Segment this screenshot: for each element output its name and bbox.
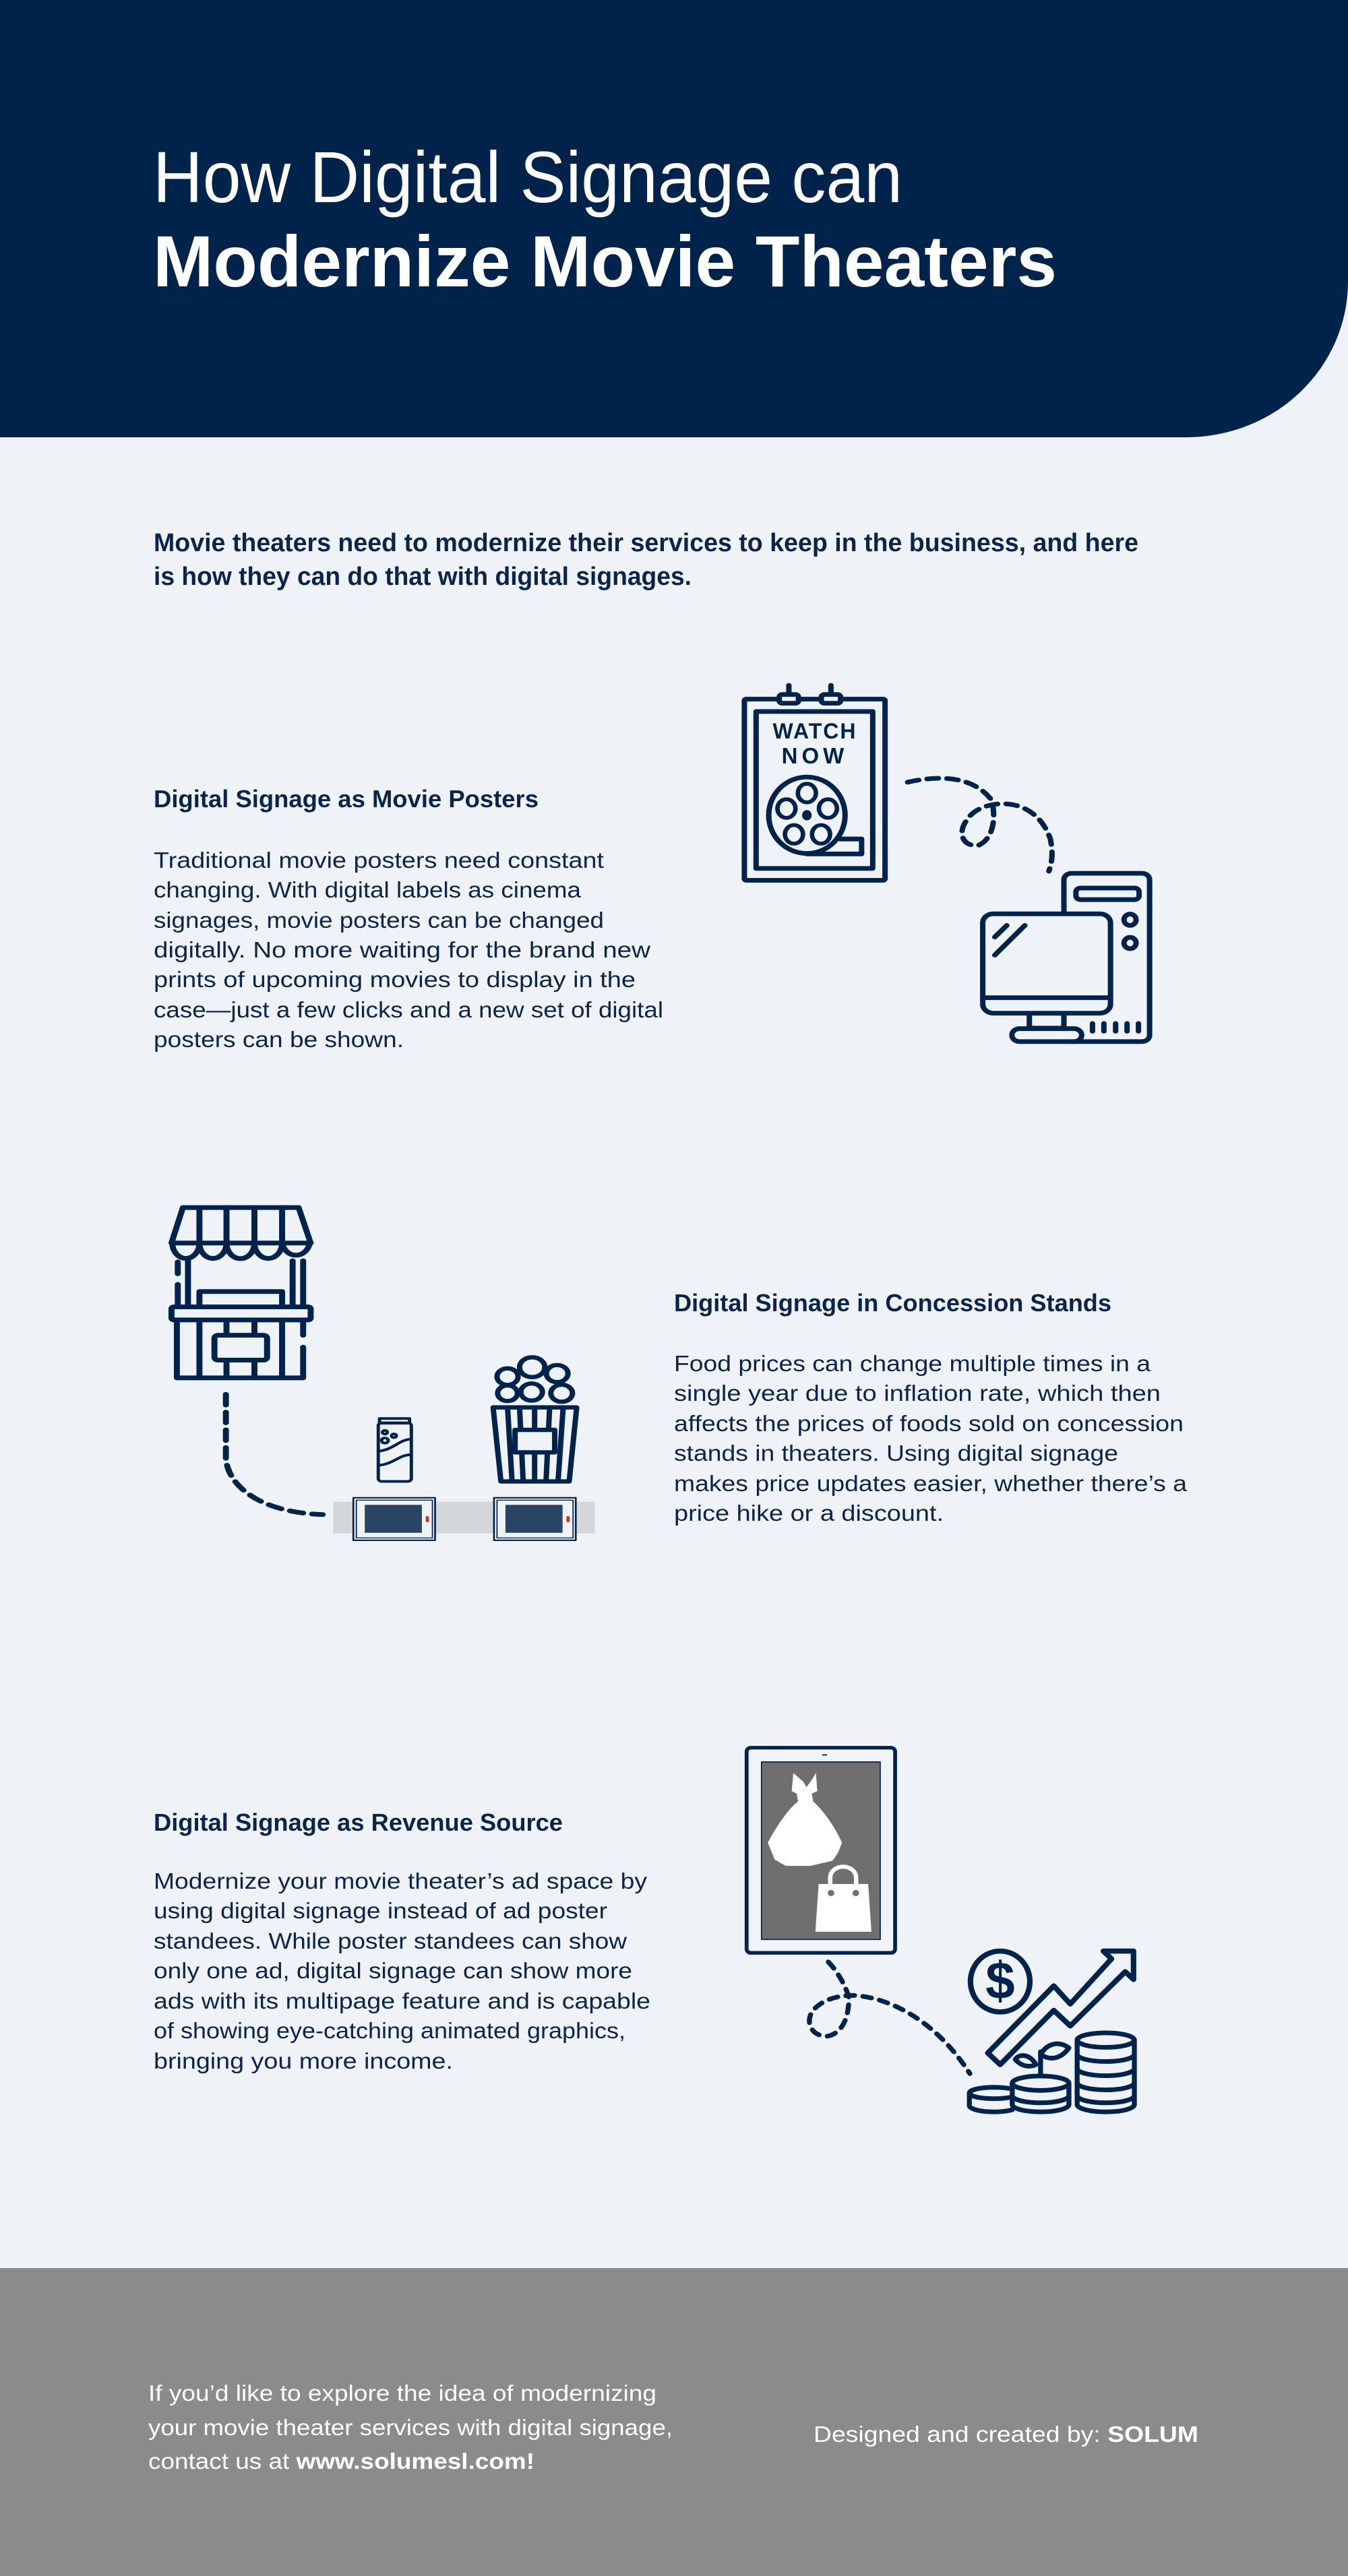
icon: popcorn [493, 1357, 577, 1482]
paragraph: movie posters: changing. With digital labels as cinema [154, 877, 582, 902]
icon: poster frame [744, 685, 885, 880]
intro text: Movie theaters need to modernize their services to keep in the business, and here [154, 529, 1138, 557]
arrow: dashed path [809, 1962, 970, 2073]
icon: dollar sign: $ [985, 1951, 1015, 2010]
title: Modernize Movie Theaters [153, 220, 1057, 302]
paragraph: revenue source: only one ad, digital signage can show more [154, 1958, 632, 1983]
footer contact text: contact us at www.solumesl.com! [148, 2449, 534, 2474]
paragraph: concession stands: price hike or a discount. [674, 1501, 944, 1526]
icon: tablet with ad [747, 1748, 895, 1953]
intro text: is how they can do that with digital signages. [154, 563, 692, 591]
paragraph: revenue source: standees. While poster standees can show [154, 1928, 627, 1953]
paragraph: concession stands: affects the prices of foods sold on concession [674, 1411, 1184, 1436]
header banner [0, 0, 1348, 437]
paragraph: concession stands: Food prices can change multiple times in a [674, 1351, 1151, 1376]
footer [0, 2268, 1348, 2576]
paragraph: movie posters: signages, movie posters can be changed [154, 908, 604, 933]
intro text [154, 529, 1138, 591]
icon: dollar coin and growth arrow [971, 1951, 1134, 2065]
poster text: WATCH NOW: WATCH [773, 719, 857, 743]
paragraph: movie posters: Traditional movie posters need constant [154, 848, 604, 873]
title [153, 136, 1057, 302]
paragraph: concession stands [674, 1351, 1188, 1526]
heading: concession stands: Digital Signage in Concession Stands [674, 1289, 1111, 1317]
footer contact text: If you’d like to explore the idea of modernizing [148, 2381, 656, 2406]
arrow: dashed path [226, 1394, 323, 1515]
paragraph: revenue source: of showing eye-catching animated graphics, [154, 2018, 625, 2043]
footer contact text [148, 2381, 673, 2474]
paragraph: movie posters: digitally. No more waiting for the brand new [154, 937, 650, 962]
title: How Digital Signage can [153, 136, 902, 218]
icon: soda can [378, 1418, 411, 1482]
paragraph: concession stands: makes price updates easier, whether there’s a [674, 1471, 1188, 1496]
icon: coin stacks with sprout [969, 2033, 1134, 2112]
paragraph: movie posters [154, 848, 663, 1052]
footer credit: Designed and created by: SOLUM [814, 2422, 1198, 2447]
illustration: poster to computer [744, 685, 1150, 1042]
paragraph: concession stands: single year due to inflation rate, which then [674, 1381, 1161, 1406]
footer contact text: your movie theater services with digital signage, [148, 2415, 673, 2440]
paragraph: concession stands: stands in theaters. Using digital signage [674, 1441, 1118, 1466]
poster text: WATCH NOW: NOW [782, 743, 848, 768]
paragraph: movie posters: posters can be shown. [154, 1027, 404, 1052]
paragraph: movie posters: case—just a few clicks and a new set of digital [154, 997, 663, 1022]
paragraph: revenue source: ads with its multipage feature and is capable [154, 1988, 650, 2013]
illustration: tablet ad to revenue [747, 1748, 1134, 2112]
paragraph: revenue source: bringing you more income. [154, 2048, 453, 2073]
illustration: concession stand [171, 1207, 594, 1540]
heading: movie posters: Digital Signage as Movie Posters [154, 785, 539, 813]
section 1 text: movie posters [154, 785, 663, 1052]
heading: revenue source: Digital Signage as Revenue Source [154, 1809, 563, 1836]
icon: stall [171, 1207, 311, 1378]
section 2 text: concession stands [674, 1289, 1188, 1526]
section 3 text: revenue source [154, 1809, 650, 2073]
paragraph: revenue source: using digital signage instead of ad poster [154, 1898, 607, 1923]
shelf with digital labels [333, 1498, 594, 1540]
paragraph: revenue source [154, 1868, 650, 2073]
arrow: dashed path [908, 778, 1052, 871]
paragraph: revenue source: Modernize your movie theater’s ad space by [154, 1868, 648, 1893]
icon: computer [983, 873, 1150, 1042]
paragraph: movie posters: prints of upcoming movies to display in the [154, 967, 636, 992]
poster text: WATCH NOW [773, 719, 857, 768]
